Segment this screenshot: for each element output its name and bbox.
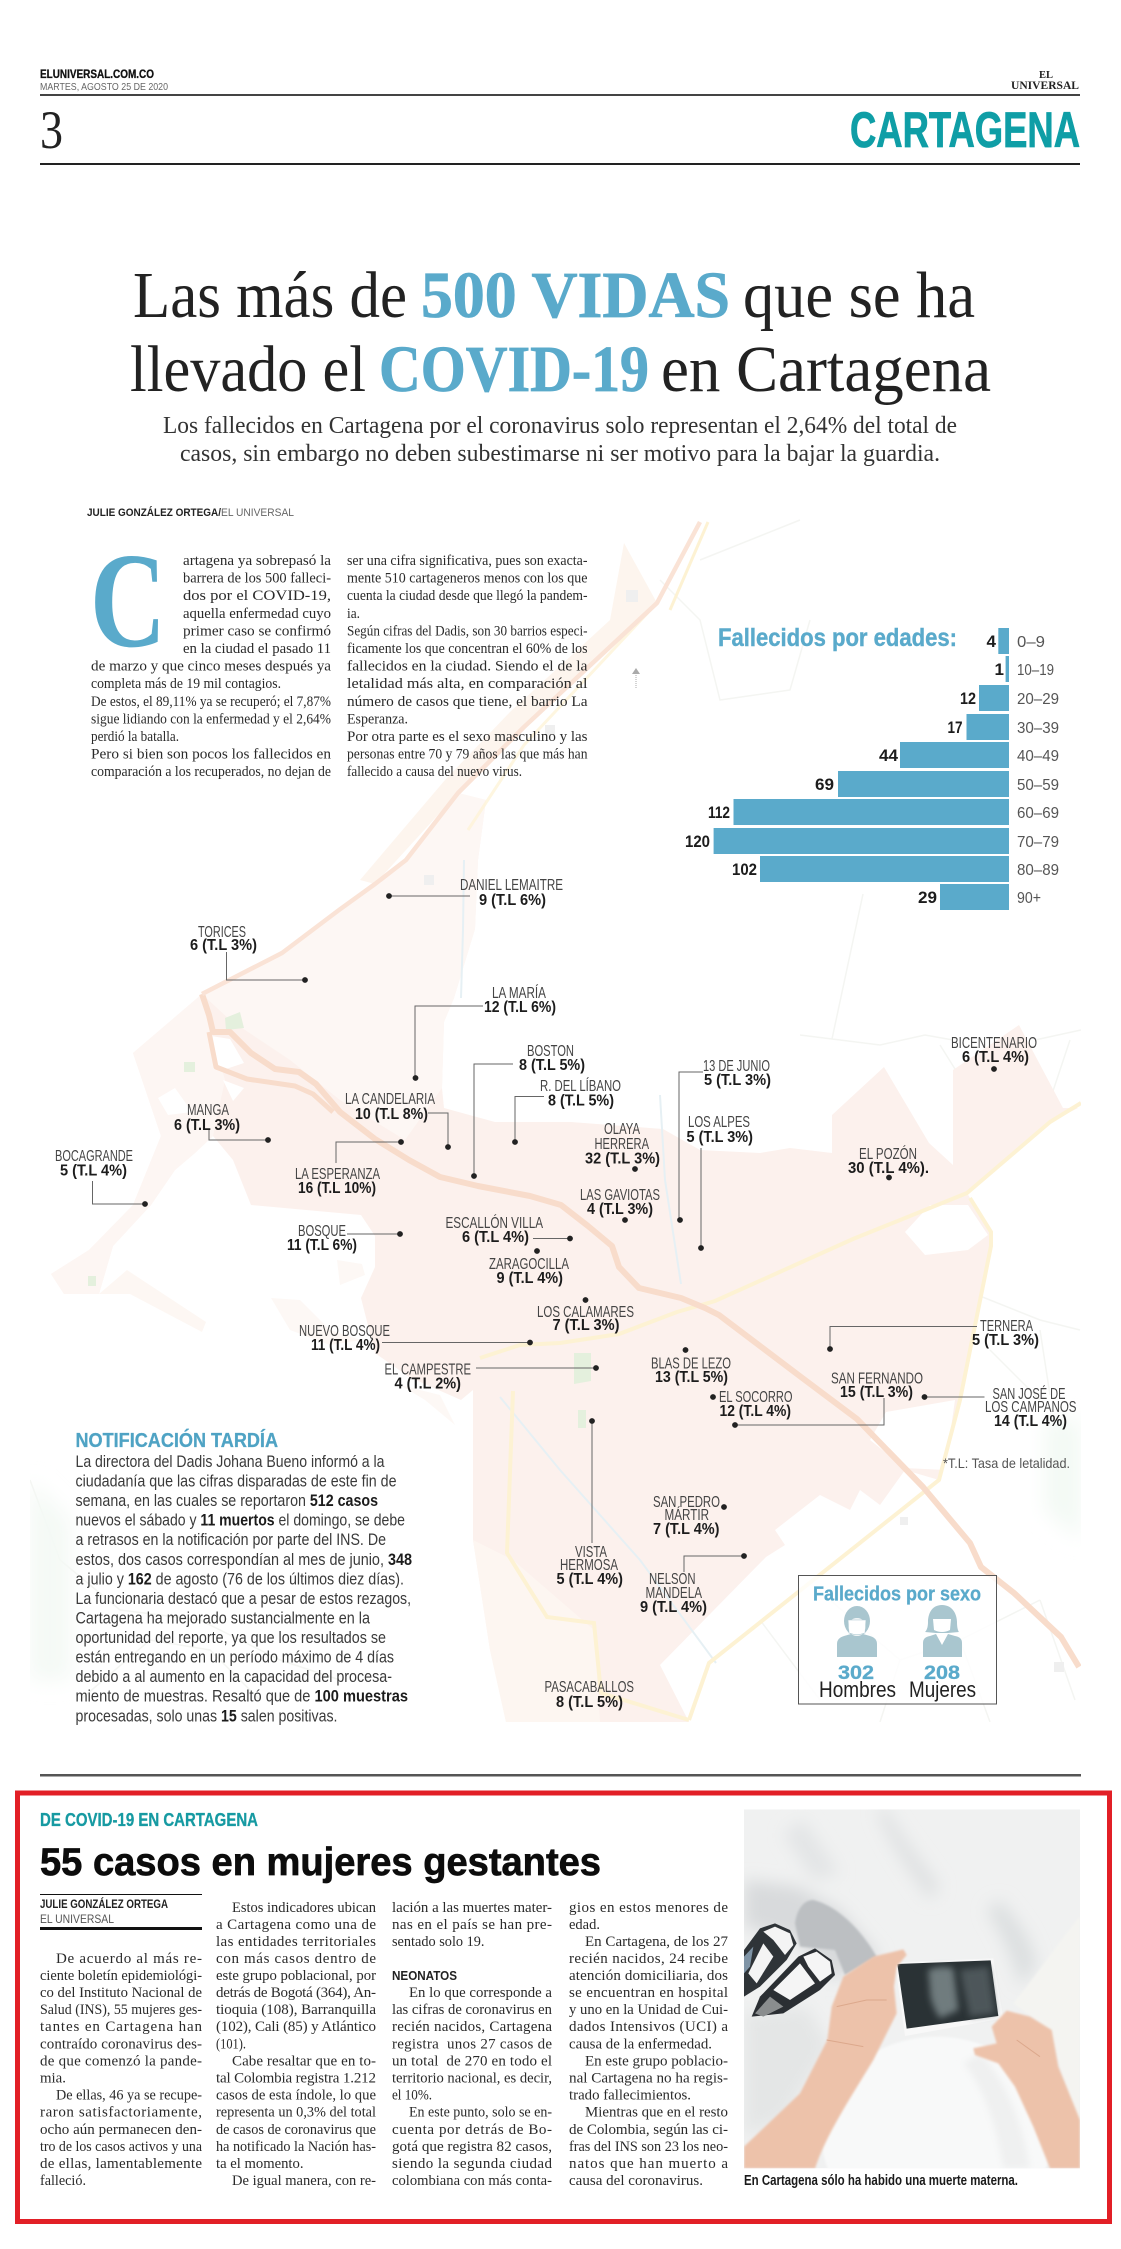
San José de los Campanos: SAN JOSÉ DE	[992, 1384, 1066, 1403]
article intro text column 2: letalidad más alta, en comparación al	[347, 676, 588, 692]
Nuevo Bosque: 11 (T.L 4%)	[311, 1337, 380, 1354]
Olaya Herrera: HERRERA	[594, 1136, 649, 1153]
right hand and arm	[973, 2011, 1080, 2168]
panel: deaths by sex	[798, 1576, 996, 1704]
Daniel Lemaitre: 9 (T.L 6%)	[479, 892, 546, 909]
Olaya Herrera: OLAYA	[604, 1121, 640, 1138]
Olaya Herrera: 32 (T.L 3%)	[585, 1150, 660, 1168]
Escallón Villa: ESCALLÓN VILLA	[446, 1213, 543, 1232]
Vista Hermosa: 5 (T.L 4%)	[556, 1571, 623, 1588]
bar values: 120	[685, 832, 710, 851]
age ranges: 0–9	[1017, 634, 1045, 651]
byline: EL UNIVERSAL	[221, 507, 294, 519]
article intro text column 2: Esperanza.	[347, 711, 408, 727]
Pasacaballos: 8 (T.L 5%)	[556, 1694, 623, 1711]
story column 3: las cifras de coronavirus en	[392, 2002, 552, 2018]
age ranges: 90+	[1017, 890, 1041, 907]
Ternera: 5 (T.L 3%)	[972, 1332, 1039, 1349]
Torices: 6 (T.L 3%)	[190, 937, 257, 954]
panel: late notification: La directora del Dadis Johana Bueno informó a la	[76, 1453, 385, 1471]
age ranges: 30–39	[1017, 720, 1059, 737]
Manga: 6 (T.L 3%)	[174, 1117, 240, 1134]
article intro text column 1: artagena ya sobrepasó la	[183, 553, 331, 569]
story column 1: contraído coronavirus des-	[40, 2036, 202, 2052]
San Fernando	[732, 1370, 923, 1428]
Olaya Herrera	[585, 1121, 660, 1172]
drop cap: C	[90, 526, 166, 676]
story column 2: casos de esta índole, lo que	[216, 2088, 376, 2104]
panel: pregnant women story	[18, 1793, 1110, 2237]
bar values: 69	[815, 775, 834, 794]
article intro text column 2: número de casos que tiene, el barrio La	[347, 694, 588, 710]
story column 4: y uno en la Unidad de Cui-	[569, 2002, 728, 2018]
story column 1: mia.	[40, 2071, 66, 2087]
article intro text column 1	[90, 526, 331, 780]
icon: man with mask	[837, 1606, 877, 1657]
story column 2: este grupo poblacional, por	[216, 1968, 376, 1984]
story column 2: De igual manera, con re-	[232, 2173, 376, 2189]
story column 2: a Cartagena como una de	[216, 1917, 376, 1933]
story column 2: ha notificado la Nación has-	[216, 2139, 376, 2155]
Bocagrande: BOCAGRANDE	[55, 1148, 133, 1165]
bar values: 102	[732, 860, 757, 879]
map of Cartagena	[30, 520, 1081, 1722]
article intro text column 2: mente 510 cartageneros menos con los que	[347, 571, 588, 587]
Los Calamares	[537, 1297, 634, 1334]
story column 3: En lo que corresponde a	[409, 1985, 552, 2001]
story column 3: En este punto, solo se en-	[409, 2105, 552, 2121]
panel: late notification: semana, en las cuales se reportaron 512 casos	[76, 1492, 378, 1510]
Los Calamares: 7 (T.L 3%)	[552, 1317, 620, 1334]
belly	[826, 2039, 975, 2158]
age ranges: 50–59	[1017, 777, 1059, 794]
west barrios paler	[51, 994, 225, 1294]
canals	[461, 860, 716, 1663]
story byline: JULIE GONZÁLEZ ORTEGA	[40, 1898, 168, 1911]
article intro text column 1: completa más de 19 mil contagios.	[91, 676, 281, 692]
story column 3: NEONATOS	[392, 1969, 457, 1983]
story column 3: sentado solo 19.	[392, 1934, 484, 1950]
Nelson Mandela: NELSON	[649, 1571, 696, 1588]
story column 3: lación a las muertes mater-	[392, 1900, 552, 1916]
panel: late notification: procesadas, solo unas 15 salen positivas.	[76, 1707, 338, 1725]
ultrasound print	[898, 1958, 998, 2029]
female count: 208	[924, 1663, 960, 1684]
bar values: 44	[879, 746, 899, 765]
story column 2: con más casos dentro de	[216, 1951, 376, 1967]
age ranges: 10–19	[1017, 662, 1054, 679]
La Candelaria: 10 (T.L 8%)	[355, 1106, 428, 1123]
story column 2: tioquia (108), Barranquilla	[216, 2002, 376, 2018]
title: 500 VIDAS	[421, 259, 730, 332]
story column 1: tro de los casos activos y una	[40, 2139, 202, 2155]
logo: EL	[1039, 69, 1053, 81]
story column 4: de Colombia, según las ci-	[569, 2122, 728, 2138]
story column 2: tal Colombia registra 1.212	[216, 2071, 376, 2087]
bar values	[685, 632, 1004, 907]
El Pozón: EL POZÓN	[859, 1144, 917, 1163]
photo: hands holding ultrasound over pregnant belly	[744, 1810, 1080, 2168]
panel: late notification: estos, dos casos correspondían al mes de junio, 348	[76, 1551, 412, 1569]
bar values: 17	[948, 718, 962, 737]
article intro text column 2	[347, 553, 588, 780]
female count: Mujeres	[909, 1677, 976, 1702]
story column 1: de ellas, lamentablemente	[40, 2156, 202, 2172]
R. del Líbano	[512, 1076, 621, 1145]
barrio labels with leader lines	[55, 877, 1076, 1711]
story column 3: territorio nacional, es decir,	[392, 2071, 552, 2087]
Bosque: 11 (T.L 6%)	[287, 1237, 357, 1254]
story column 4: En Cartagena, de los 27	[585, 1934, 728, 1950]
story column 1: ciente boletín epidemiológi-	[40, 1968, 202, 1984]
San Pedro Mártir: SAN PEDRO	[653, 1494, 720, 1511]
Daniel Lemaitre	[386, 877, 563, 909]
article intro text column 1: barrera de los 500 falleci-	[183, 571, 331, 587]
story column 4: Mientras que en el resto	[585, 2105, 728, 2121]
story column 4: En este grupo poblacio-	[585, 2054, 728, 2070]
La Esperanza: LA ESPERANZA	[295, 1166, 380, 1183]
San José de los Campanos: 14 (T.L 4%)	[994, 1413, 1067, 1430]
story column 2: (102), Cali (85) y Atlántico	[216, 2019, 376, 2035]
Nelson Mandela: 9 (T.L 4%)	[640, 1599, 707, 1616]
story column 2: de casos de coronavirus que	[216, 2122, 376, 2138]
Blas de Lezo: 13 (T.L 5%)	[655, 1369, 728, 1386]
article intro text column 1: comparación a los recuperados, no dejan de	[91, 764, 331, 780]
story column 2: Cabe resaltar que en to-	[232, 2054, 376, 2070]
Nelson Mandela: MANDELA	[646, 1585, 702, 1602]
water cut-outs	[158, 1036, 988, 1470]
Pasacaballos: PASACABALLOS	[544, 1679, 634, 1696]
article intro text column 1: perdió la batalla.	[91, 729, 179, 745]
article intro text column 1: en la ciudad el pasado 11	[183, 641, 331, 657]
south paler	[473, 1540, 600, 1722]
north barrios paler	[202, 793, 486, 1140]
Zaragocilla	[489, 1248, 569, 1287]
El Campestre: 4 (T.L 2%)	[394, 1376, 461, 1392]
article intro text column 1: sigue lidiando con la enfermedad y el 2,64%	[91, 711, 331, 727]
age ranges: 60–69	[1017, 805, 1059, 822]
bar chart: deaths by age	[685, 624, 1059, 910]
byline: JULIE GONZÁLEZ ORTEGA/	[87, 506, 221, 519]
13 de Junio: 5 (T.L 3%)	[704, 1072, 771, 1089]
El Campestre	[384, 1362, 599, 1392]
story column 2: detrás de Bogotá (364), An-	[216, 1985, 376, 2001]
Bosque: BOSQUE	[298, 1223, 346, 1240]
article intro text column 2: ficamente los que concentran el 60% de los	[347, 641, 588, 657]
story column 4: nal Cartagena no ha regis-	[569, 2071, 728, 2087]
article intro text column 2: Por otra parte es el sexo masculino y las	[347, 729, 588, 745]
story column 2: las entidades territoriales	[216, 1934, 376, 1950]
panel: late notification: ciudadanía que las cifras disparadas de este fin de	[76, 1473, 396, 1491]
Vista Hermosa: VISTA	[575, 1544, 607, 1561]
story column 1	[40, 1951, 202, 2189]
story byline	[40, 1894, 202, 1930]
story column 2: (101).	[216, 2036, 246, 2052]
San Fernando: SAN FERNANDO	[831, 1370, 923, 1388]
lethality note: *T.L: Tasa de letalidad.	[943, 1455, 1070, 1471]
13 de Junio	[677, 1058, 771, 1223]
article intro text column 1: Pero si bien son pocos los fallecidos en	[91, 747, 331, 763]
title	[130, 259, 991, 406]
title: COVID-19	[379, 333, 649, 406]
El Pozón	[848, 1144, 929, 1180]
story column 4: causa del coronavirus.	[569, 2173, 703, 2189]
male count	[819, 1663, 896, 1702]
Bosque	[287, 1223, 403, 1254]
panel: late notification	[76, 1428, 412, 1725]
site name: ELUNIVERSAL.COM.CO	[40, 67, 154, 81]
Boston: 8 (T.L 5%)	[519, 1057, 585, 1074]
article intro text column 1: de marzo y que cinco meses después ya	[91, 659, 331, 675]
story column 1: tantes en Cartagena han	[40, 2019, 202, 2035]
byline	[87, 506, 294, 519]
panel heading: NOTIFICACIÓN TARDÍA	[76, 1428, 278, 1452]
story column 3: registra unos 27 casos de	[392, 2036, 552, 2052]
Bicentenario: 6 (T.L 4%)	[962, 1049, 1029, 1066]
story column 1: ocho aún permanecen den-	[40, 2122, 202, 2138]
Blas de Lezo	[651, 1347, 731, 1386]
R. del Líbano: 8 (T.L 5%)	[548, 1092, 614, 1110]
article intro text column 1: primer caso se confirmó	[183, 623, 331, 639]
San Pedro Mártir: 7 (T.L 4%)	[653, 1521, 720, 1538]
photo caption: En Cartagena sólo ha habido una muerte materna.	[744, 2173, 1018, 2189]
title: llevado el	[130, 333, 366, 406]
Manga: MANGA	[187, 1102, 229, 1119]
panel heading: Fallecidos por sexo	[813, 1584, 981, 1606]
San Fernando: 15 (T.L 3%)	[840, 1384, 913, 1401]
article intro text column 2: ser una cifra significativa, pues son exacta-	[347, 553, 588, 569]
Bocagrande: 5 (T.L 4%)	[60, 1162, 127, 1180]
La María: LA MARÍA	[492, 983, 546, 1002]
story column 3: colombiana con más conta-	[392, 2173, 552, 2189]
Daniel Lemaitre: DANIEL LEMAITRE	[460, 877, 563, 894]
bar values: 12	[960, 689, 976, 708]
Vista Hermosa: HERMOSA	[560, 1557, 618, 1574]
article intro text column 2: personas entre 70 y 79 años las que más han	[347, 747, 588, 763]
La Esperanza: 16 (T.L 10%)	[298, 1180, 376, 1197]
story column 4: recién nacidos, 24 recibe	[569, 1951, 728, 1967]
Ternera: TERNERA	[980, 1318, 1033, 1335]
age ranges	[1017, 634, 1059, 907]
story column 3: recién nacidos, Cartagena	[392, 2019, 552, 2035]
kicker: DE COVID-19 EN CARTAGENA	[40, 1810, 258, 1830]
Nelson Mandela	[640, 1553, 747, 1616]
bar values: 1	[995, 660, 1004, 679]
story column 3: nas en el país se han pre-	[392, 1917, 552, 1933]
Bocagrande	[55, 1148, 148, 1207]
chart heading: Fallecidos por edades:	[718, 624, 957, 652]
El Campestre: EL CAMPESTRE	[384, 1362, 471, 1378]
page number: 3	[40, 100, 63, 160]
bar values: 112	[708, 803, 730, 822]
R. del Líbano: R. DEL LÍBANO	[540, 1076, 621, 1095]
story byline: EL UNIVERSAL	[40, 1914, 115, 1926]
Ternera	[827, 1318, 1039, 1352]
Torices: TORICES	[198, 924, 246, 941]
newspaper header	[40, 67, 1080, 165]
subtitle	[163, 413, 957, 467]
Boston: BOSTON	[527, 1043, 574, 1060]
Boston	[471, 1043, 585, 1179]
bars	[714, 628, 1009, 910]
subtitle: casos, sin embargo no deben subestimarse ni ser motivo para la bajar la guardia.	[180, 441, 940, 467]
article intro text column 1: dos por el COVID-19,	[183, 588, 331, 604]
beach strip north	[360, 543, 657, 884]
yellow roads	[468, 522, 1081, 1720]
panel: late notification: a retrasos en la notificación por parte del INS. De	[76, 1531, 386, 1549]
Las Gaviotas: 4 (T.L 3%)	[587, 1201, 653, 1218]
story column 1: de que comenzó la pande-	[40, 2054, 202, 2070]
Nuevo Bosque: NUEVO BOSQUE	[299, 1323, 390, 1340]
La María: 12 (T.L 6%)	[484, 999, 556, 1016]
main avenues	[202, 522, 1079, 1667]
story column 4: se encuentran en hospital	[569, 1985, 728, 2001]
article intro text column 2: cuenta la ciudad desde que llegó la pandem-	[347, 588, 588, 604]
panel: late notification: Cartagena ha mejorado sustancialmente en la	[76, 1610, 371, 1628]
Las Gaviotas	[580, 1187, 660, 1223]
Los Alpes	[686, 1114, 753, 1251]
story column 2: Estos indicadores ubican	[232, 1900, 376, 1916]
title: que se ha	[743, 259, 975, 332]
panel: late notification: están entregando en un período máximo de 4 días	[76, 1649, 394, 1667]
Bicentenario	[951, 1035, 1037, 1072]
story column 1: co del Instituto Nacional de	[40, 1985, 202, 2001]
La María	[413, 983, 556, 1081]
Escallón Villa	[446, 1213, 573, 1246]
left hand and arm	[744, 1949, 907, 2168]
headline: 55 casos en mujeres gestantes	[40, 1841, 601, 1884]
story column 4	[569, 1900, 728, 2189]
article intro text column 2: Según cifras del Dadis, son 30 barrios especi-	[347, 623, 588, 639]
age ranges: 20–29	[1017, 691, 1059, 708]
castillogrande	[99, 1270, 206, 1332]
male count: Hombres	[819, 1677, 896, 1702]
title: Las más de	[133, 259, 407, 332]
article intro text column 2: fallecido a causa del nuevo virus.	[347, 764, 522, 780]
Blas de Lezo: BLAS DE LEZO	[651, 1356, 731, 1372]
bar values: 4	[987, 632, 997, 651]
panel: late notification: miento de muestras. Resaltó que de 100 muestras	[76, 1688, 408, 1706]
panel: late notification: debido a al aumento en la capacidad del procesa-	[76, 1668, 392, 1686]
panel: late notification: La funcionaria destacó que a pesar de estos rezagos,	[76, 1590, 411, 1608]
fabric folds	[744, 1809, 1037, 2137]
gray leg	[795, 1900, 877, 1975]
El Socorro	[710, 1389, 792, 1420]
logo	[1011, 69, 1079, 92]
small road markers	[424, 590, 1064, 1672]
Torices	[190, 924, 308, 983]
parks	[88, 1012, 591, 1428]
story column 4: dados Intensivos (UCI) a	[569, 2019, 728, 2035]
female count	[909, 1663, 976, 1702]
story column 3: cuenta por detrás de Bo-	[392, 2122, 552, 2138]
city land mass	[206, 998, 1078, 1722]
El Pozón: 30 (T.L 4%).	[848, 1160, 929, 1177]
story column 4: edad.	[569, 1917, 600, 1933]
story column 1: falleció.	[40, 2173, 86, 2189]
upper right fold	[1013, 1917, 1080, 2137]
Los Alpes: 5 (T.L 3%)	[686, 1129, 753, 1146]
panel: late notification: a julio y 162 de agosto (76 de los últimos diez días).	[76, 1570, 404, 1588]
Las Gaviotas: LAS GAVIOTAS	[580, 1187, 660, 1204]
story column 4: natos que han muerto a	[569, 2156, 728, 2172]
article intro text column 2: fallecidos en la ciudad. Siendo el de la	[347, 659, 588, 675]
story column 4: fras del INS son 23 los neo-	[569, 2139, 728, 2155]
story column 2: representa un 0,3% del total	[216, 2105, 376, 2121]
title: en Cartagena	[661, 333, 991, 406]
story column 3	[392, 1900, 552, 2189]
age ranges: 40–49	[1017, 748, 1059, 765]
Pasacaballos	[544, 1679, 634, 1711]
logo: UNIVERSAL	[1011, 78, 1079, 92]
pale green fringe	[38, 1508, 62, 1672]
Zaragocilla: 9 (T.L 4%)	[496, 1270, 563, 1287]
El Socorro: EL SOCORRO	[719, 1389, 792, 1406]
Escallón Villa: 6 (T.L 4%)	[462, 1229, 529, 1246]
story column 2: ta el momento.	[216, 2156, 304, 2172]
article intro text column 1: aquella enfermedad cuyo	[183, 606, 331, 622]
north arrow	[632, 668, 640, 688]
Los Alpes: LOS ALPES	[688, 1114, 750, 1131]
icon: woman with mask	[923, 1605, 962, 1657]
story column 1: De ellas, 46 ya se recupe-	[56, 2088, 202, 2104]
article intro text column 1: De estos, el 89,11% ya se recuperó; el 7,87%	[91, 694, 331, 710]
story column 1: Salud (INS), 55 mujeres ges-	[40, 2002, 202, 2018]
La Esperanza	[295, 1139, 404, 1197]
story column 2	[216, 1900, 376, 2189]
story column 1: De acuerdo al más re-	[56, 1951, 202, 1967]
La Candelaria	[345, 1091, 451, 1150]
La Candelaria: LA CANDELARIA	[345, 1091, 435, 1108]
age ranges: 80–89	[1017, 862, 1059, 879]
male count: 302	[838, 1663, 874, 1684]
bar values: 29	[918, 888, 937, 907]
story column 1: raron satisfactoriamente,	[40, 2105, 202, 2121]
story column 3: el 10%.	[392, 2088, 432, 2104]
subtitle: Los fallecidos en Cartagena por el coronavirus solo representan el 2,64% del total de	[163, 413, 957, 439]
baby shoes	[744, 1923, 835, 2017]
story column 3: siendo la segunda ciudad	[392, 2156, 552, 2172]
San Pedro Mártir	[653, 1494, 727, 1538]
story column 4: gios en estos menores de	[569, 1900, 728, 1916]
San José de los Campanos	[922, 1384, 1076, 1430]
date: MARTES, AGOSTO 25 DE 2020	[40, 81, 168, 93]
story column 3: un total de 270 en todo el	[392, 2054, 552, 2070]
13 de Junio: 13 DE JUNIO	[703, 1058, 770, 1075]
article intro text column 2: ia.	[347, 606, 360, 622]
story column 4: trado fallecimientos.	[569, 2088, 691, 2104]
story column 4: atención domiciliaria, dos	[569, 1968, 728, 1984]
story column 4: causa de la enfermedad.	[569, 2036, 712, 2052]
Nuevo Bosque	[299, 1323, 533, 1354]
panel: late notification: nuevos el sábado y 11 muertos el domingo, se debe	[76, 1512, 405, 1530]
El Socorro: 12 (T.L 4%)	[720, 1403, 791, 1420]
Vista Hermosa	[556, 1418, 623, 1588]
San José de los Campanos: LOS CAMPANOS	[985, 1399, 1076, 1416]
panel: late notification: oportunidad del reporte, ya que los resultados se	[76, 1629, 386, 1647]
San Pedro Mártir: MÁRTIR	[664, 1505, 709, 1524]
bay islands	[271, 1260, 455, 1425]
Manga	[174, 1102, 271, 1143]
Los Calamares: LOS CALAMARES	[537, 1304, 634, 1321]
Bicentenario: BICENTENARIO	[951, 1035, 1037, 1052]
story column 3: gotá que registra 82 casos,	[392, 2139, 552, 2155]
age ranges: 70–79	[1017, 834, 1059, 851]
outlying faint roads	[30, 520, 1081, 1722]
Zaragocilla: ZARAGOCILLA	[489, 1256, 569, 1273]
